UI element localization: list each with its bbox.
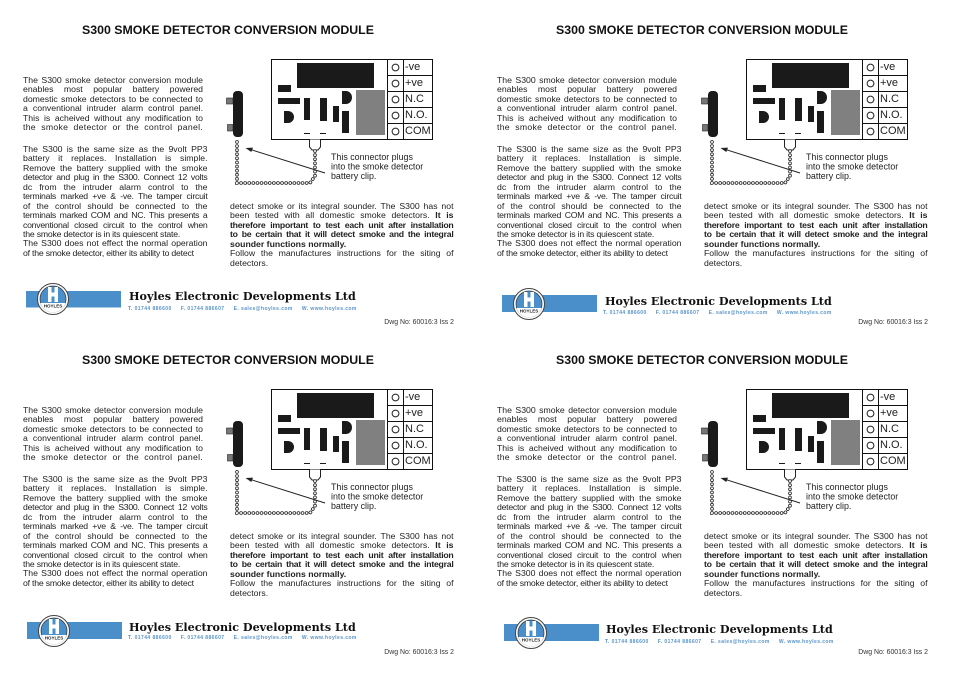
logo: Hoyles badge and blue strip: [26, 283, 121, 315]
text block: installation: terminals marked COM and NC. This presents a: [497, 540, 682, 550]
company name: Hoyles Electronic Developments Ltd: [606, 623, 833, 636]
text block: testing notes: been tested with all domestic smoke detectors. It is: [704, 540, 928, 550]
text block: testing notes: [230, 201, 454, 268]
logo: Hoyles badge and blue strip: HOYLES: [522, 638, 540, 642]
text block: introduction: [23, 75, 203, 132]
text block: testing notes: been tested with all domestic smoke detectors. It is: [230, 540, 454, 550]
diagram: module wiring: -ve: [880, 61, 895, 73]
text block: installation: Remove the battery supplied with the smoke: [497, 493, 682, 503]
contact details: T. 01744 886600 F. 01744 886607 E. sales@hoyles.com W. www.hoyles.com: [605, 639, 834, 645]
text block: testing notes: therefore important to test each unit after installation: [230, 550, 454, 560]
text block: testing notes: detect smoke or its integral sounder. The S300 has not: [704, 531, 928, 541]
text block: installation: conventional closed circuit to the control when: [23, 550, 208, 560]
text block: testing notes: sounder functions normally.: [230, 239, 346, 249]
text block: installation: Remove the battery supplied with the smoke: [23, 163, 208, 173]
heading: S300 SMOKE DETECTOR CONVERSION MODULE: [556, 353, 848, 367]
text block: installation: terminals marked COM and NC. This presents a: [23, 210, 208, 220]
diagram: module wiring: This connector plugs: [331, 152, 413, 162]
text block: installation: battery it replaces. Installation is simple.: [497, 153, 682, 163]
company name: Hoyles Electronic Developments Ltd: [605, 295, 832, 308]
diagram: module wiring: N.O.: [880, 109, 903, 121]
text block: installation: Remove the battery supplied with the smoke: [23, 493, 208, 503]
diagram: module wiring: N.C: [405, 423, 424, 435]
text block: testing notes: detect smoke or its integral sounder. The S300 has not: [704, 201, 928, 211]
diagram: module wiring: -ve: [880, 391, 895, 403]
text block: testing notes: to be certain that it will detect smoke and the integral: [230, 229, 454, 239]
text block: installation: the smoke detector is in its quiescent state.: [497, 559, 654, 569]
text block: testing notes: sounder functions normally.: [704, 239, 820, 249]
text block: installation: of the smoke detector, either its ability to detect: [23, 578, 194, 588]
diagram: module wiring: [701, 389, 908, 515]
text block: introduction: This is acheived without any modification to: [497, 113, 677, 123]
text block: installation: detector and plug in the S300. Connect 12 volts: [23, 502, 208, 512]
diagram: module wiring: into the smoke detector: [331, 492, 423, 502]
text block: installation: battery it replaces. Installation is simple.: [497, 483, 682, 493]
text block: introduction: [23, 405, 203, 462]
text block: testing notes: detect smoke or its integral sounder. The S300 has not: [230, 531, 454, 541]
drawing number: Dwg No: 60016:3 Iss 2: [384, 649, 454, 656]
text block: testing notes: Follow the manufactures instructions for the siting of: [704, 248, 928, 258]
text block: installation: detector and plug in the S300. Connect 12 volts: [497, 172, 682, 182]
text block: installation: of the control should be connected to the: [497, 531, 682, 541]
text block: introduction: domestic smoke detectors to be connected to: [23, 94, 203, 104]
text block: installation: the smoke detector is in its quiescent state.: [497, 229, 654, 239]
diagram: module wiring: COM: [880, 455, 906, 467]
company name: Hoyles Electronic Developments Ltd: [129, 621, 356, 634]
text block: installation: [497, 474, 682, 588]
text block: installation: The S300 is the same size as the 9volt PP3: [23, 144, 208, 154]
text block: testing notes: detectors.: [230, 588, 268, 598]
drawing number: Dwg No: 60016:3 Iss 2: [384, 319, 454, 326]
logo: Hoyles badge and blue strip: [502, 288, 597, 320]
diagram: module wiring: -ve: [405, 391, 420, 403]
text block: installation: The S300 is the same size as the 9volt PP3: [23, 474, 208, 484]
diagram: module wiring: into the smoke detector: [331, 162, 423, 172]
diagram: module wiring: N.C: [880, 423, 899, 435]
text block: installation: dc from the intruder alarm control to the: [497, 182, 682, 192]
text block: installation: the smoke detector is in its quiescent state.: [23, 229, 180, 239]
text block: installation: terminals marked +ve & -ve. The tamper circuit: [23, 521, 208, 531]
diagram: module wiring: N.O.: [405, 439, 428, 451]
heading: S300 SMOKE DETECTOR CONVERSION MODULE: [82, 353, 374, 367]
contact details: T. 01744 886600 F. 01744 886607 E. sales@hoyles.com W. www.hoyles.com: [603, 310, 832, 316]
diagram: module wiring: COM: [405, 455, 431, 467]
text block: introduction: enables most popular battery powered: [23, 414, 203, 424]
diagram: module wiring: This connector plugs: [806, 152, 888, 162]
text block: testing notes: detectors.: [230, 258, 268, 268]
text block: installation: [497, 144, 682, 258]
diagram: module wiring: -ve: [405, 61, 420, 73]
text block: installation: of the smoke detector, either its ability to detect: [497, 248, 668, 258]
text block: testing notes: Follow the manufactures instructions for the siting of: [230, 248, 454, 258]
text block: testing notes: been tested with all domestic smoke detectors. It is: [704, 210, 928, 220]
text block: installation: terminals marked COM and NC. This presents a: [23, 540, 208, 550]
heading: S300 SMOKE DETECTOR CONVERSION MODULE: [82, 23, 374, 37]
text block: introduction: domestic smoke detectors to be connected to: [497, 94, 677, 104]
text block: testing notes: [230, 531, 454, 598]
text block: testing notes: [704, 531, 928, 598]
text block: installation: dc from the intruder alarm control to the: [23, 182, 208, 192]
text block: installation: The S300 does not effect the normal operation: [23, 238, 208, 248]
text block: installation: The S300 is the same size as the 9volt PP3: [497, 144, 682, 154]
text block: introduction: the smoke detector or the control panel.: [497, 452, 677, 462]
text block: testing notes: sounder functions normally.: [704, 569, 820, 579]
diagram: module wiring: COM: [405, 125, 431, 137]
diagram: module wiring: +ve: [880, 407, 898, 419]
text block: testing notes: therefore important to test each unit after installation: [704, 220, 928, 230]
text block: testing notes: therefore important to test each unit after installation: [230, 220, 454, 230]
text block: introduction: [497, 75, 677, 132]
drawing number: Dwg No: 60016:3 Iss 2: [858, 319, 928, 326]
text block: introduction: enables most popular battery powered: [497, 84, 677, 94]
diagram: module wiring: N.C: [880, 93, 899, 105]
logo: Hoyles badge and blue strip: [27, 615, 122, 647]
diagram: module wiring: into the smoke detector: [806, 162, 898, 172]
text block: testing notes: Follow the manufactures instructions for the siting of: [230, 578, 454, 588]
logo: Hoyles badge and blue strip: HOYLES: [520, 308, 538, 314]
text block: testing notes: to be certain that it will detect smoke and the integral: [704, 229, 928, 239]
text block: introduction: a conventional intruder alarm control panel.: [23, 103, 203, 113]
drawing number: Dwg No: 60016:3 Iss 2: [858, 649, 928, 656]
text block: installation: detector and plug in the S300. Connect 12 volts: [23, 172, 208, 182]
text block: testing notes: [704, 201, 928, 268]
text block: introduction: The S300 smoke detector conversion module: [23, 405, 203, 415]
logo: Hoyles badge and blue strip: HOYLES: [44, 304, 62, 308]
text block: introduction: the smoke detector or the control panel.: [23, 452, 203, 462]
text block: installation: conventional closed circuit to the control when: [497, 550, 682, 560]
text block: testing notes: detectors.: [704, 258, 742, 268]
company name: Hoyles Electronic Developments Ltd: [129, 290, 356, 303]
text block: introduction: This is acheived without any modification to: [23, 443, 203, 453]
diagram: module wiring: N.O.: [880, 439, 903, 451]
text block: introduction: a conventional intruder alarm control panel.: [497, 103, 677, 113]
text block: installation: the smoke detector is in its quiescent state.: [23, 559, 180, 569]
diagram: module wiring: [226, 59, 433, 185]
diagram: module wiring: battery clip.: [331, 501, 376, 511]
text block: installation: dc from the intruder alarm control to the: [23, 512, 208, 522]
diagram: module wiring: [226, 389, 433, 515]
text block: testing notes: therefore important to test each unit after installation: [704, 550, 928, 560]
text block: installation: of the control should be connected to the: [23, 201, 208, 211]
panel: top-left module leaflet: [23, 23, 454, 326]
diagram: module wiring: This connector plugs: [806, 482, 888, 492]
text block: installation: [23, 474, 208, 588]
text block: introduction: This is acheived without any modification to: [497, 443, 677, 453]
diagram: module wiring: COM: [880, 125, 906, 137]
text block: introduction: The S300 smoke detector conversion module: [497, 405, 677, 415]
text block: introduction: the smoke detector or the control panel.: [497, 122, 677, 132]
text block: installation: detector and plug in the S300. Connect 12 volts: [497, 502, 682, 512]
text block: installation: of the smoke detector, either its ability to detect: [497, 578, 668, 588]
text block: installation: battery it replaces. Installation is simple.: [23, 153, 208, 163]
text block: introduction: enables most popular battery powered: [23, 84, 203, 94]
text block: installation: terminals marked +ve & -ve. The tamper circuit: [497, 521, 682, 531]
text block: installation: The S300 does not effect the normal operation: [497, 568, 682, 578]
text block: introduction: a conventional intruder alarm control panel.: [23, 433, 203, 443]
diagram: module wiring: +ve: [405, 407, 423, 419]
text block: installation: of the control should be connected to the: [23, 531, 208, 541]
text block: testing notes: to be certain that it will detect smoke and the integral: [230, 559, 454, 569]
text block: installation: of the smoke detector, either its ability to detect: [23, 248, 194, 258]
diagram: module wiring: N.C: [405, 93, 424, 105]
contact details: T. 01744 886600 F. 01744 886607 E. sales@hoyles.com W. www.hoyles.com: [128, 306, 357, 312]
text block: installation: The S300 is the same size as the 9volt PP3: [497, 474, 682, 484]
diagram: module wiring: N.O.: [405, 109, 428, 121]
diagram: module wiring: battery clip.: [331, 171, 376, 181]
text block: introduction: The S300 smoke detector conversion module: [497, 75, 677, 85]
text block: installation: terminals marked +ve & -ve. The tamper circuit: [497, 191, 682, 201]
text block: installation: The S300 does not effect the normal operation: [497, 238, 682, 248]
text block: testing notes: detect smoke or its integral sounder. The S300 has not: [230, 201, 454, 211]
diagram: module wiring: [701, 59, 908, 185]
text block: installation: of the control should be connected to the: [497, 201, 682, 211]
panel: bottom-right module leaflet: [497, 353, 928, 656]
text block: testing notes: sounder functions normally.: [230, 569, 346, 579]
diagram: module wiring: +ve: [405, 77, 423, 89]
diagram: module wiring: into the smoke detector: [806, 492, 898, 502]
heading: S300 SMOKE DETECTOR CONVERSION MODULE: [556, 23, 848, 37]
text block: installation: terminals marked COM and NC. This presents a: [497, 210, 682, 220]
logo: Hoyles badge and blue strip: [504, 617, 599, 649]
text block: installation: conventional closed circuit to the control when: [23, 220, 208, 230]
text block: introduction: domestic smoke detectors to be connected to: [497, 424, 677, 434]
contact details: T. 01744 886600 F. 01744 886607 E. sales@hoyles.com W. www.hoyles.com: [128, 635, 357, 641]
text block: testing notes: Follow the manufactures instructions for the siting of: [704, 578, 928, 588]
text block: testing notes: detectors.: [704, 588, 742, 598]
logo: Hoyles badge and blue strip: HOYLES: [45, 636, 63, 640]
text block: installation: dc from the intruder alarm control to the: [497, 512, 682, 522]
diagram: module wiring: +ve: [880, 77, 898, 89]
text block: installation: Remove the battery supplied with the smoke: [497, 163, 682, 173]
text block: introduction: domestic smoke detectors to be connected to: [23, 424, 203, 434]
text block: installation: terminals marked +ve & -ve. The tamper circuit: [23, 191, 208, 201]
text block: installation: battery it replaces. Installation is simple.: [23, 483, 208, 493]
text block: installation: conventional closed circuit to the control when: [497, 220, 682, 230]
text block: introduction: This is acheived without any modification to: [23, 113, 203, 123]
text block: installation: The S300 does not effect the normal operation: [23, 568, 208, 578]
text block: introduction: the smoke detector or the control panel.: [23, 122, 203, 132]
panel: top-right module leaflet: [497, 23, 928, 326]
panel: bottom-left module leaflet: [23, 353, 454, 656]
text block: introduction: The S300 smoke detector conversion module: [23, 75, 203, 85]
text block: installation: [23, 144, 208, 258]
diagram: module wiring: This connector plugs: [331, 482, 413, 492]
text block: testing notes: been tested with all domestic smoke detectors. It is: [230, 210, 454, 220]
text block: testing notes: to be certain that it will detect smoke and the integral: [704, 559, 928, 569]
diagram: module wiring: battery clip.: [806, 171, 851, 181]
text block: introduction: enables most popular battery powered: [497, 414, 677, 424]
text block: introduction: [497, 405, 677, 462]
text block: introduction: a conventional intruder alarm control panel.: [497, 433, 677, 443]
diagram: module wiring: battery clip.: [806, 501, 851, 511]
